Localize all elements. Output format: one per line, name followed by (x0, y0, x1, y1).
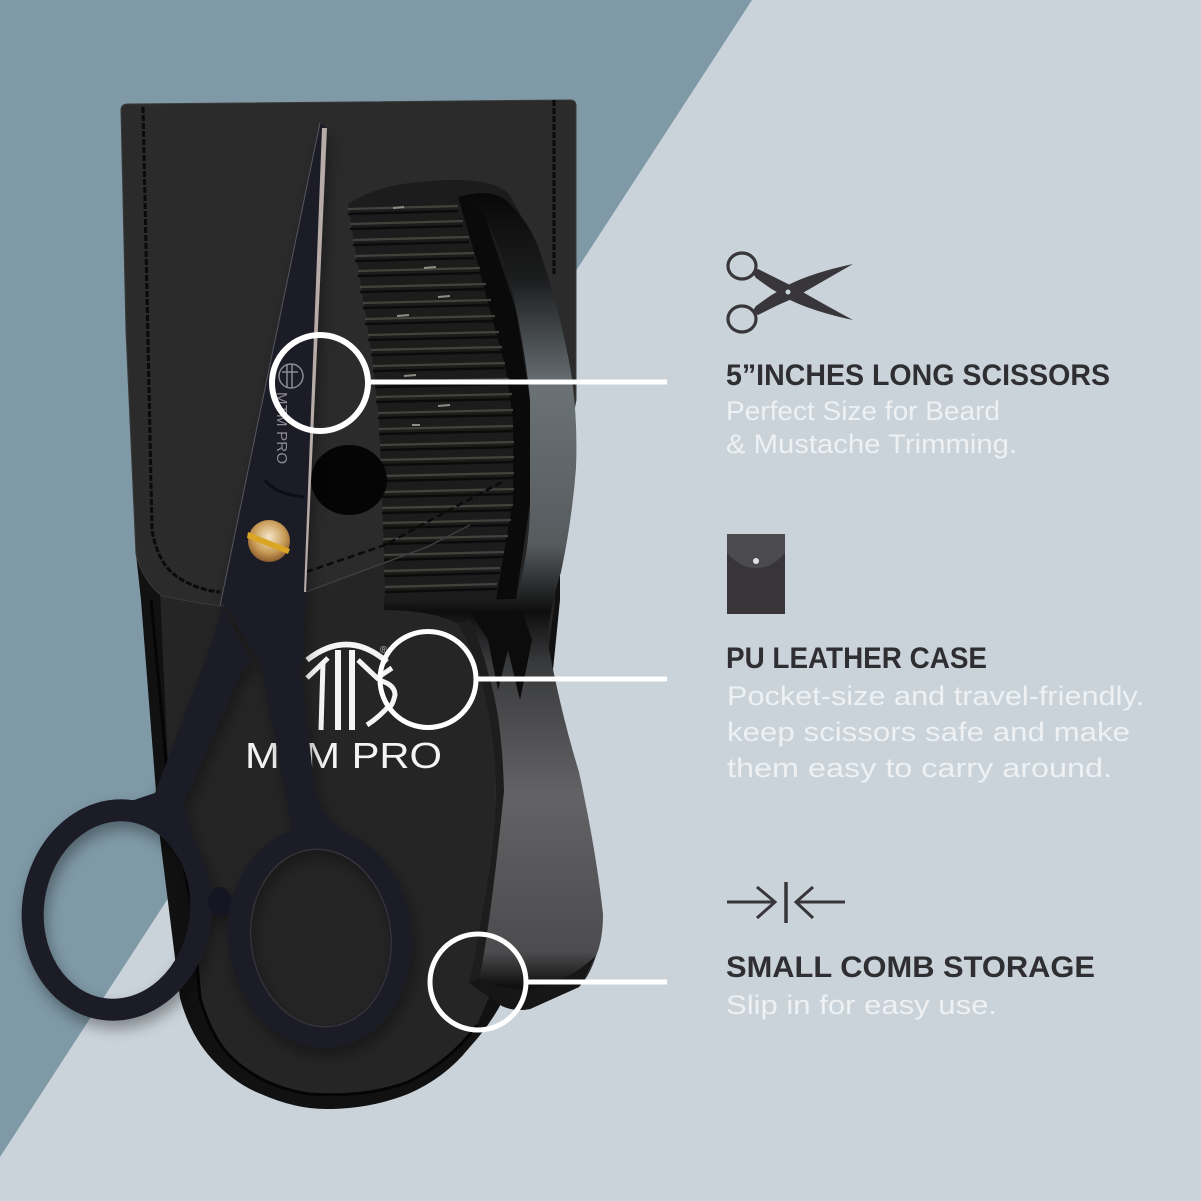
blade engraved logo (279, 364, 303, 388)
flap edge crease (306, 525, 470, 592)
comb spine and handle (384, 193, 603, 1010)
product: scissors (20, 123, 413, 1046)
body text (727, 681, 1144, 783)
scissors blade and shank (220, 123, 345, 852)
scissors blade bright edge (304, 128, 327, 592)
product: leather case (121, 100, 576, 1109)
case stitching (151, 600, 477, 1095)
feature: leather case (726, 534, 1144, 783)
scissors left ring (20, 799, 214, 1021)
logo registered mark: ® (380, 645, 388, 656)
background: dark diagonal panel (0, 0, 752, 1157)
flap stitching right (552, 100, 556, 276)
body text: & Mustache Trimming. (726, 429, 1017, 459)
comb handle dark edge (457, 620, 504, 985)
case snap button (311, 445, 387, 515)
scissors right ring (227, 828, 413, 1046)
logo wordmark: MTM PRO (245, 735, 442, 776)
comb handle jagged shadow (470, 610, 532, 700)
case flap (121, 100, 576, 606)
comb tooth glints (393, 207, 450, 425)
body text: keep scissors safe and make (727, 717, 1130, 747)
case pouch body (160, 400, 555, 1095)
flap stitching left (143, 107, 220, 592)
scissors left arm (128, 606, 252, 845)
heading: PU LEATHER CASE (726, 642, 987, 675)
callout: scissors (272, 335, 667, 431)
body text: them easy to carry around. (727, 753, 1112, 783)
comb teeth shadows (348, 211, 514, 592)
comb handle bottom band (469, 956, 596, 1010)
heading: 5”INCHES LONG SCISSORS (726, 359, 1110, 392)
flap edge stitching across comb (306, 482, 502, 572)
product: comb (306, 180, 603, 1010)
scissors inner ring highlight (241, 841, 401, 1035)
icon: compact arrows (727, 882, 845, 923)
callout: comb (430, 934, 667, 1030)
scissors blade left edge (220, 123, 320, 606)
feature: scissors length (726, 253, 1110, 459)
scissors finger rest (208, 887, 232, 917)
icon: pouch (727, 534, 785, 614)
callout: case (380, 632, 667, 728)
logo emblem (307, 644, 395, 730)
scissors gold screw (247, 520, 290, 562)
body text (726, 396, 1017, 459)
body text: Perfect Size for Beard (726, 396, 1000, 426)
comb teeth highlights (348, 206, 514, 587)
icon: scissors (728, 253, 853, 332)
body text: Pocket-size and travel-friendly. (727, 681, 1144, 711)
body text: Slip in for easy use. (726, 990, 997, 1020)
case logo: MTM PRO (245, 644, 442, 776)
blade engraved text: MTM PRO (273, 392, 290, 464)
comb slot (348, 180, 540, 604)
comb tooth roots (458, 197, 530, 600)
scissors blade shoulder (265, 480, 304, 497)
feature: comb storage (726, 882, 1095, 1020)
case pouch outer edge (136, 380, 560, 1109)
heading: SMALL COMB STORAGE (726, 951, 1095, 984)
